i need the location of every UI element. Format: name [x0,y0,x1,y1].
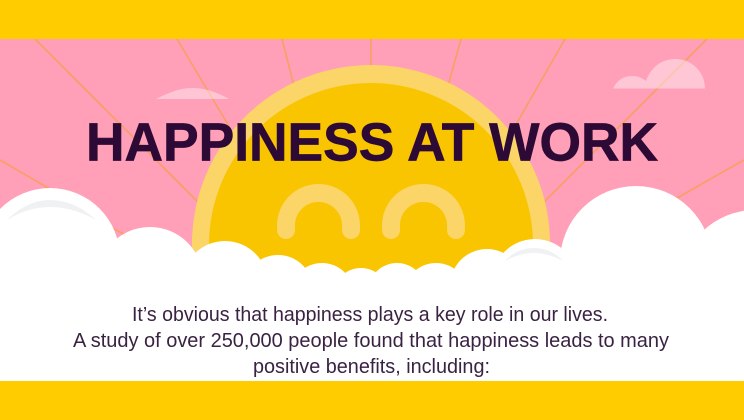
right smiling eye [391,193,456,230]
title: HAPPINESS AT WORK [86,114,658,172]
cloud shading, right [505,248,563,261]
intro paragraph [73,304,669,378]
white cloud bank [0,186,744,382]
intro paragraph: positive benefits, including: [253,356,490,378]
cloud shading, left [7,200,96,220]
bottom yellow band [0,381,744,420]
sun rays [0,39,744,237]
top yellow band [0,0,744,39]
intro paragraph: A study of over 250,000 people found that happiness leads to many [73,330,669,352]
sun [192,65,550,420]
pink sky panel [0,39,744,299]
intro paragraph: It’s obvious that happiness plays a key role in our lives. [132,304,608,326]
small cloud, left sky [156,88,229,99]
left smiling eye [286,193,351,230]
small cloud, right sky [613,59,705,88]
